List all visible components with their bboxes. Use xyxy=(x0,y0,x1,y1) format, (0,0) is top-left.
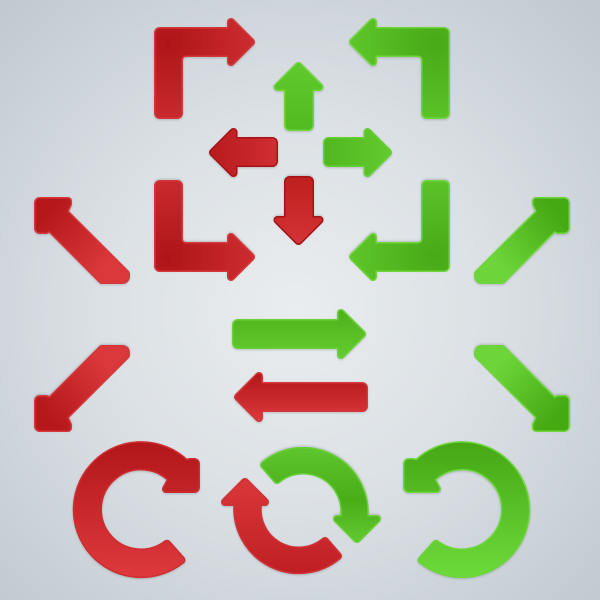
arrow: red diagonal bottom-left xyxy=(38,349,126,428)
arrow: green circular large xyxy=(407,445,526,574)
arrow: green small up xyxy=(278,66,320,127)
arrow: red small down xyxy=(278,180,320,241)
arrow: green elbow bottom-right xyxy=(353,184,446,277)
arrow: green long right xyxy=(236,313,362,355)
arrow: red circular middle xyxy=(225,482,338,570)
arrow: red elbow bottom-left xyxy=(158,184,251,277)
arrow: red circular large xyxy=(77,445,196,574)
arrow: green circular middle xyxy=(264,451,377,539)
arrow: red elbow top-left xyxy=(158,22,251,115)
arrow: green diagonal bottom-right xyxy=(478,349,566,428)
arrow: green elbow top-right xyxy=(353,22,446,115)
arrow: green diagonal top-right xyxy=(478,201,566,280)
arrow: red small left xyxy=(213,132,274,173)
arrow: green small right xyxy=(327,132,388,173)
arrow: red diagonal top-left xyxy=(38,201,126,280)
arrow: red long left xyxy=(238,376,364,418)
